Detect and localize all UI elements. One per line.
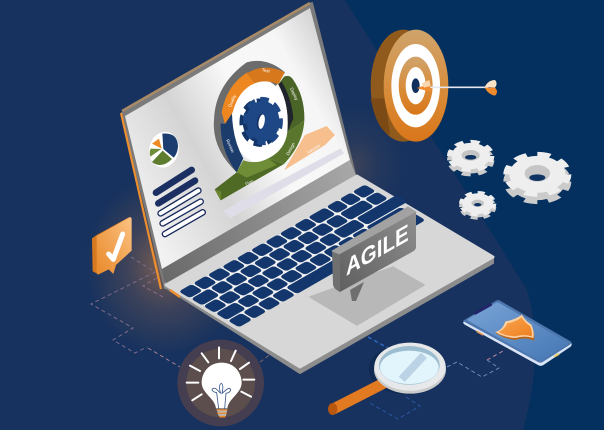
shadow strip: [223, 148, 344, 218]
segment: review: Review: [225, 138, 236, 154]
trackpad: [310, 267, 424, 325]
handle: [328, 384, 383, 415]
sign label: AGILE: [346, 219, 409, 282]
laptop lid: [121, 3, 356, 289]
launch arrow: Launch: [306, 143, 321, 155]
icon: magnifying glass: [328, 343, 446, 415]
gear large right: [507, 155, 567, 201]
icon: checkmark bubble: [92, 217, 132, 274]
ring side: [214, 61, 285, 172]
segment: design: Design: [285, 141, 296, 156]
icon: gears: [450, 142, 567, 218]
cycle diagram: [214, 61, 335, 200]
icon: light bulb: [177, 340, 264, 426]
plan arrow: Plan: [244, 178, 255, 187]
blue gear: [239, 97, 283, 147]
shield: [495, 315, 534, 341]
inner disc: [231, 79, 289, 163]
list bars: [156, 170, 203, 234]
segment: deploy: Deploy: [289, 87, 299, 102]
segment: test: Test: [261, 67, 271, 74]
laptop base: [165, 176, 493, 373]
icon: phone with shield: [463, 300, 572, 366]
dashed connector lines: [91, 257, 503, 419]
icon: target with arrow: [371, 30, 497, 142]
pie chart: [146, 129, 182, 170]
laptop: [121, 3, 493, 373]
segment: quality: Quality: [227, 93, 237, 108]
screen content: [146, 61, 344, 234]
gear small bottom: [461, 193, 494, 218]
keyboard: [179, 181, 432, 327]
agile sign: [332, 207, 416, 301]
gear small top: [450, 142, 491, 174]
